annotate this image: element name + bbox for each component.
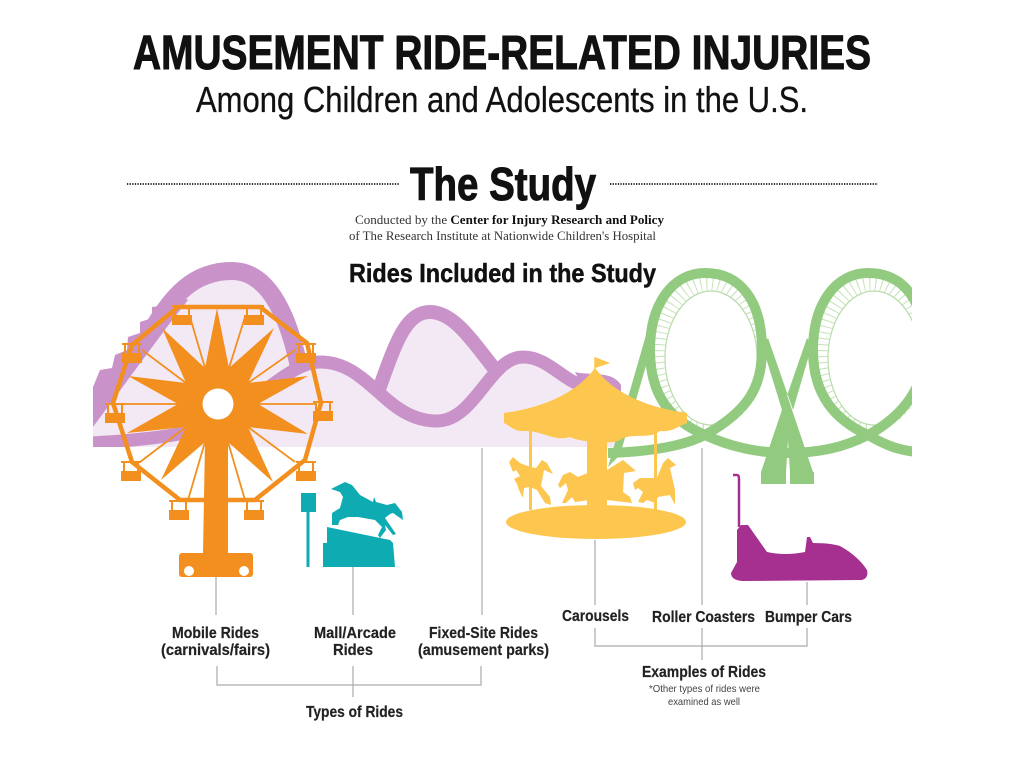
label: fixed-site rides: (amusement parks) (418, 642, 549, 659)
label: mobile rides (161, 625, 270, 659)
label: mobile rides: (carnivals/fairs) (161, 642, 270, 659)
label: examples of rides: Examples of Rides (642, 664, 766, 681)
label: mobile rides: Mobile Rides (172, 625, 259, 642)
connector lines (216, 448, 807, 697)
heading: The Study: The Study (410, 158, 596, 210)
green looping coaster (608, 273, 930, 484)
carousel (504, 358, 687, 539)
label: bumper cars: Bumper Cars (765, 609, 852, 626)
label: fixed-site rides (418, 625, 549, 659)
mall ride horse (323, 482, 403, 567)
footnote: examined as well (668, 696, 740, 708)
bumper car (731, 475, 867, 581)
label: fixed-site rides: Fixed-Site Rides (429, 625, 538, 642)
study attribution: Conducted by the Center for Injury Research and Policy (355, 212, 665, 227)
mall ride sign (301, 493, 316, 567)
purple wooden coaster (90, 271, 621, 447)
label: mall/arcade rides (314, 625, 396, 659)
study attribution (349, 212, 665, 243)
footnote (649, 683, 760, 708)
label: types of rides: Types of Rides (306, 704, 403, 721)
subtitle: Among Children and Adolescents in the U.S. (196, 79, 808, 120)
study attribution: of The Research Institute at Nationwide Children's Hospital (349, 228, 656, 243)
label: carousels: Carousels (562, 608, 629, 625)
ferris wheel (105, 306, 333, 577)
label: roller coasters: Roller Coasters (652, 609, 755, 626)
footnote: *Other types of rides were (649, 683, 760, 695)
heading: rides included: Rides Included in the Study (349, 258, 656, 288)
label: mall/arcade rides: Mall/Arcade (314, 625, 396, 642)
label: mall/arcade rides: Rides (333, 642, 373, 659)
